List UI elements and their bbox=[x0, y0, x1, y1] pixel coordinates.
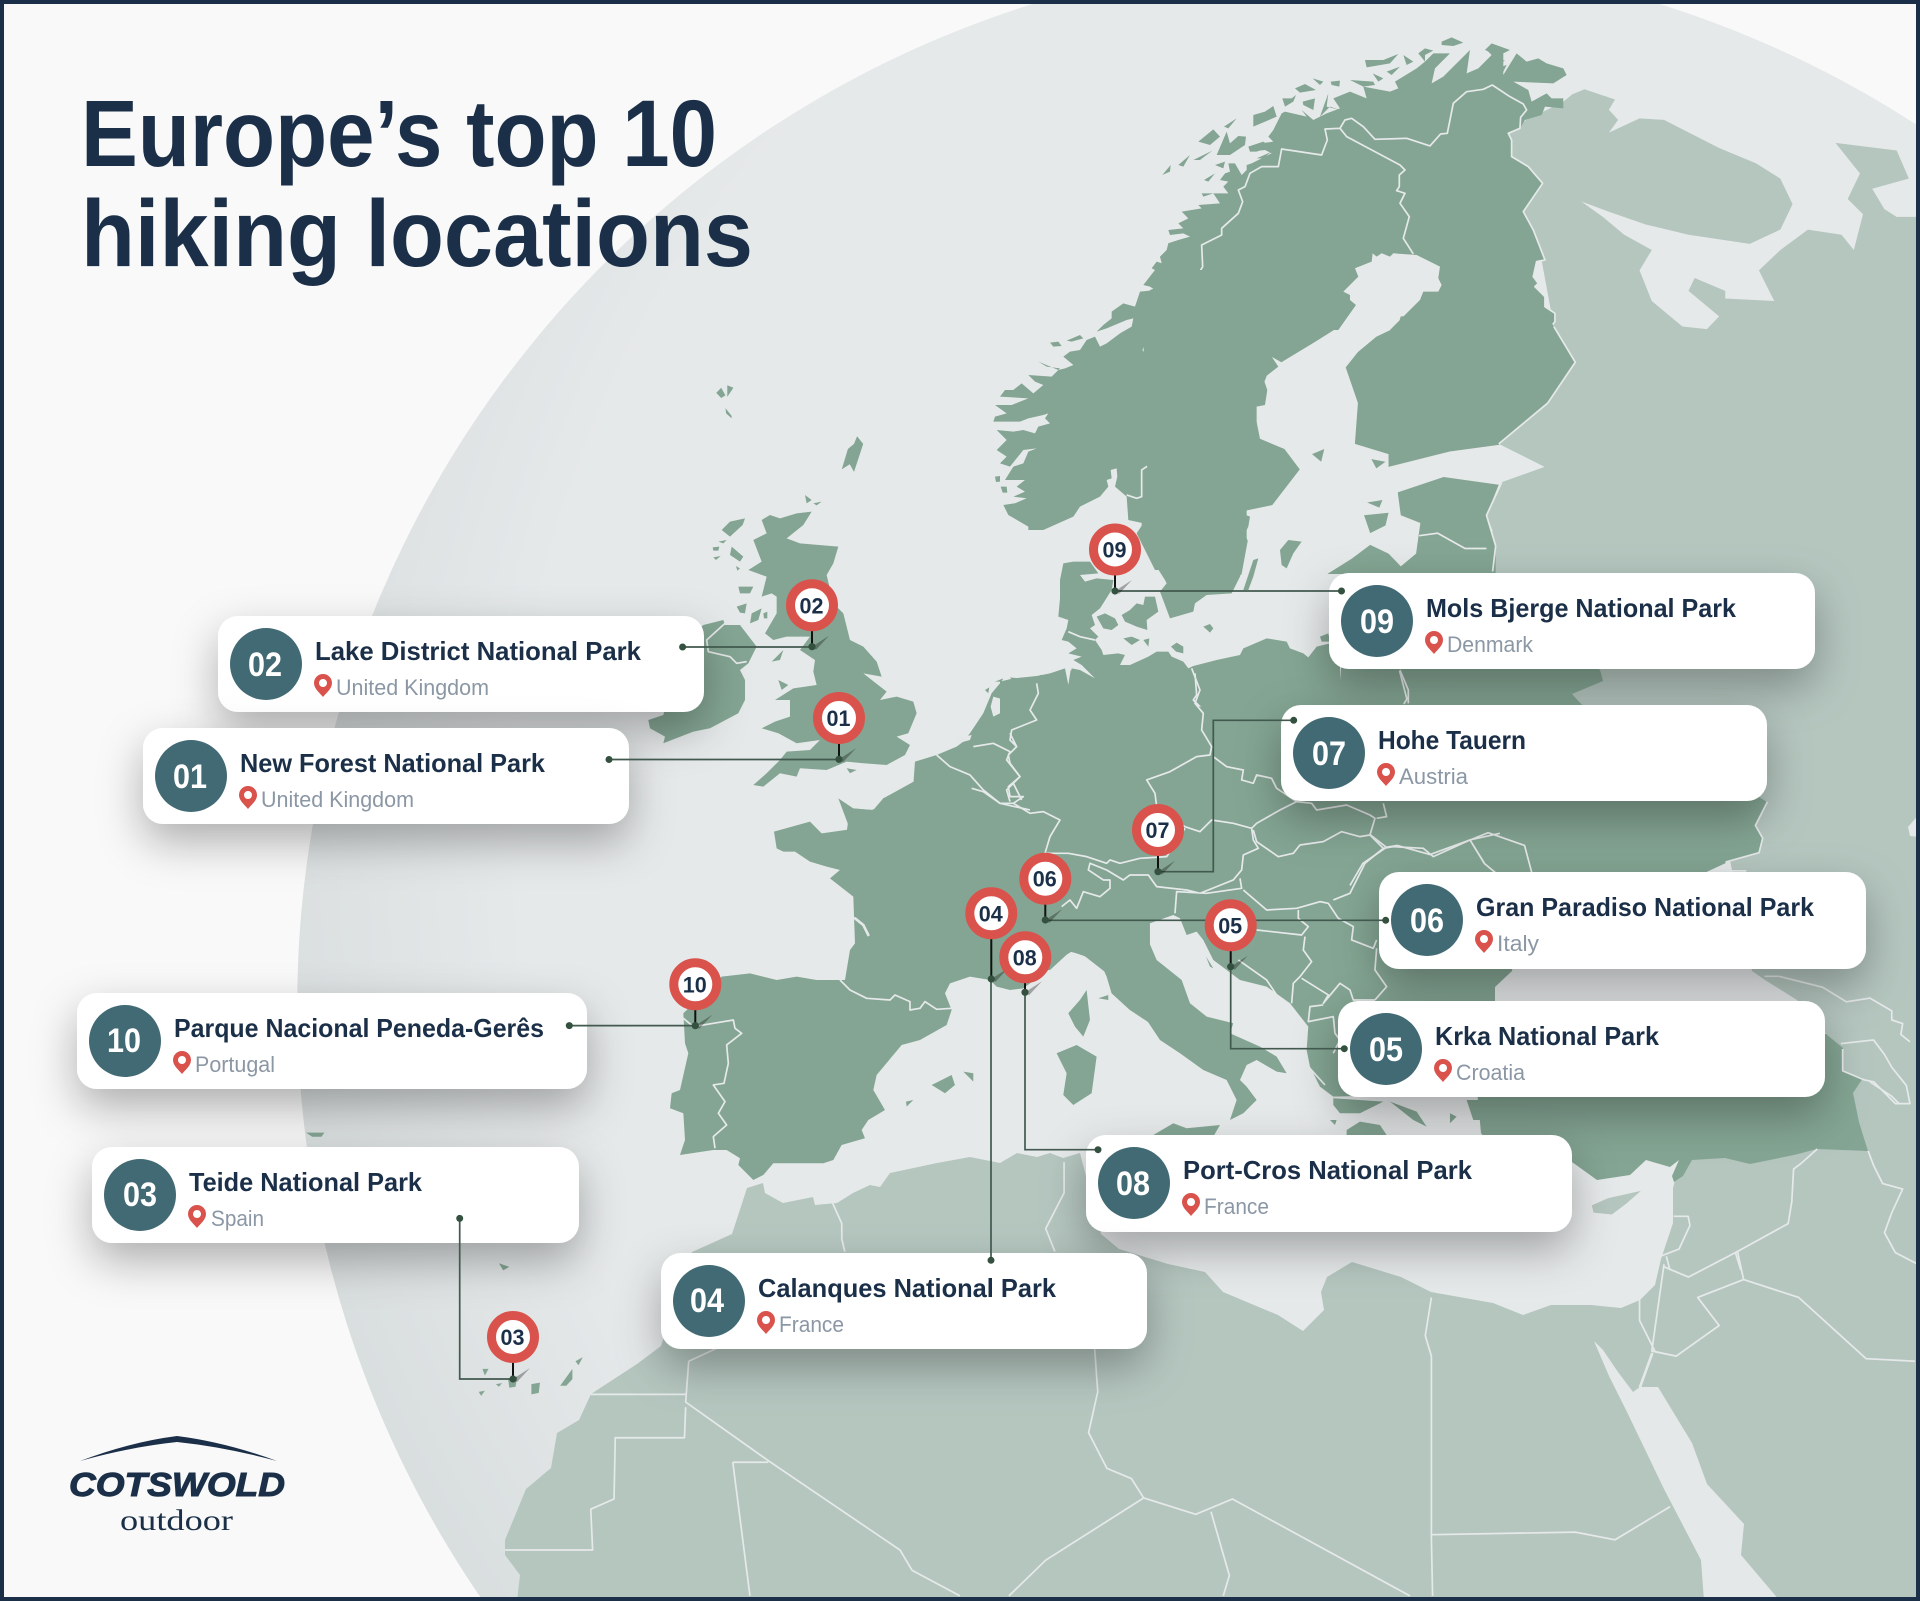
card 06: Gran Paradiso: 06 bbox=[1410, 902, 1444, 940]
pin 05: 05 bbox=[1218, 913, 1242, 938]
land: Russia and east bbox=[1488, 89, 1916, 1140]
card 07: Hohe Tauern: Austria bbox=[1399, 764, 1469, 789]
borders: Caucasus and Middle East bbox=[1350, 802, 1920, 1270]
pin 01: 01 bbox=[826, 706, 850, 731]
card 07: Hohe Tauern bbox=[1281, 705, 1767, 801]
card 04: Calanques: France bbox=[779, 1312, 844, 1337]
pin 07: 07 bbox=[1146, 818, 1170, 843]
borders: central Europe and Balkans bbox=[1000, 668, 1500, 1085]
card 02: Lake District: United Kingdom bbox=[336, 675, 489, 700]
card 06: Gran Paradiso: Gran Paradiso National Park bbox=[1476, 892, 1815, 922]
card 03: Teide: Spain bbox=[211, 1206, 264, 1231]
logo: Cotswold Outdoor: COTSWOLD bbox=[69, 1466, 285, 1503]
borders: northern Scandinavia bbox=[1200, 84, 1556, 324]
card 01: New Forest: 01 bbox=[173, 758, 207, 796]
title bbox=[81, 81, 753, 287]
logo: Cotswold Outdoor bbox=[69, 1436, 285, 1537]
land: Canary and other islands bbox=[306, 1133, 583, 1396]
card 01: New Forest: New Forest National Park bbox=[240, 748, 546, 778]
card 06: Gran Paradiso: Italy bbox=[1497, 931, 1539, 956]
card 10: Peneda-Gerês: 10 bbox=[107, 1022, 141, 1060]
card 07: Hohe Tauern: 07 bbox=[1312, 735, 1346, 773]
land: central Europe, Italy and Balkans bbox=[1000, 668, 1500, 1140]
borders: Low Countries bbox=[937, 733, 1030, 810]
card 05: Krka bbox=[1338, 1001, 1825, 1097]
card 04: Calanques bbox=[661, 1253, 1147, 1349]
card 03: Teide: Teide National Park bbox=[189, 1167, 423, 1197]
pin 10: 10 bbox=[683, 972, 707, 997]
card 04: Calanques: 04 bbox=[690, 1282, 724, 1320]
pin 06 bbox=[1024, 857, 1067, 924]
borders: North Africa bbox=[505, 1203, 960, 1596]
borders: Egypt, Libya, Arabia bbox=[1009, 1162, 1915, 1596]
pin 05 bbox=[1209, 904, 1252, 970]
land: Cyprus bbox=[1592, 1191, 1641, 1214]
land: central Sweden, southern Finland and Baltics bbox=[1144, 316, 1575, 587]
land: Africa and Middle East bbox=[505, 1140, 1920, 1601]
card 08: Port-Cros bbox=[1086, 1135, 1572, 1232]
card 02: Lake District: Lake District National Park bbox=[315, 636, 642, 666]
card 01: New Forest bbox=[143, 728, 629, 824]
pin 01 bbox=[818, 696, 860, 763]
card 06: Gran Paradiso bbox=[1379, 872, 1866, 969]
card 04: Calanques: Calanques National Park bbox=[758, 1273, 1057, 1303]
pin 03: 03 bbox=[500, 1325, 524, 1350]
card 03: Teide bbox=[92, 1147, 579, 1243]
land: Britain, Ireland and Low Countries bbox=[648, 495, 1016, 830]
land: northern Scandinavia and Finland bbox=[1150, 37, 1567, 330]
islands: northern Norway bbox=[1162, 37, 1510, 182]
connector lines bbox=[456, 588, 1389, 1379]
sea: Red Sea and Caspian bbox=[1594, 813, 1920, 1601]
pin 07 bbox=[1136, 808, 1180, 875]
title: Europe’s top 10 bbox=[81, 81, 717, 187]
land: France and Iberia bbox=[670, 780, 1150, 1180]
land: Turkey bbox=[1478, 1034, 1868, 1182]
card 09: Mols Bjerge: 09 bbox=[1360, 603, 1394, 641]
card 08: Port-Cros: France bbox=[1204, 1194, 1269, 1219]
card 05: Krka: 05 bbox=[1369, 1031, 1403, 1069]
card 10: Peneda-Gerês: Portugal bbox=[195, 1052, 275, 1077]
islands: Danish and Baltic bbox=[1097, 540, 1330, 653]
islands: south-west Norway bbox=[995, 335, 1083, 493]
card 02: Lake District: 02 bbox=[248, 646, 282, 684]
card 03: Teide: 03 bbox=[123, 1176, 157, 1214]
card 08: Port-Cros: 08 bbox=[1116, 1165, 1150, 1203]
land: North Atlantic islands bbox=[716, 385, 863, 472]
pin 09 bbox=[1094, 528, 1136, 595]
pin 09: 09 bbox=[1102, 538, 1126, 562]
card 07: Hohe Tauern: Hohe Tauern bbox=[1378, 725, 1526, 755]
land: southern Sweden, Denmark and north German coast bbox=[1040, 510, 1340, 707]
land: southern Norway and Sweden bbox=[993, 270, 1278, 570]
title: hiking locations bbox=[81, 181, 753, 287]
land: Poland, Ukraine and Balkans east bbox=[1340, 668, 1766, 1001]
card 10: Peneda-Gerês bbox=[77, 993, 587, 1089]
pin 03 bbox=[492, 1316, 534, 1383]
card 09: Mols Bjerge: Mols Bjerge National Park bbox=[1426, 593, 1737, 623]
logo: Cotswold Outdoor: outdoor bbox=[120, 1504, 233, 1537]
borders: France, Spain, Portugal bbox=[684, 788, 1000, 1148]
pin 08: 08 bbox=[1013, 945, 1037, 970]
card 10: Peneda-Gerês: Parque Nacional Peneda-Gerês bbox=[174, 1013, 544, 1043]
card 01: New Forest: United Kingdom bbox=[261, 787, 414, 812]
card 08: Port-Cros: Port-Cros National Park bbox=[1183, 1155, 1473, 1185]
pin 02 bbox=[790, 584, 834, 650]
pin 06: 06 bbox=[1033, 867, 1057, 892]
card 02: Lake District bbox=[218, 616, 704, 712]
card 09: Mols Bjerge bbox=[1329, 573, 1815, 669]
borders: Baltics and Finland east bbox=[1400, 327, 1575, 704]
card 05: Krka: Krka National Park bbox=[1435, 1021, 1660, 1051]
pin 08 bbox=[1004, 936, 1047, 996]
card 09: Mols Bjerge: Denmark bbox=[1447, 632, 1534, 657]
pin 04: 04 bbox=[979, 901, 1004, 926]
land: northern France and Low Countries bbox=[847, 684, 1000, 830]
pin 10 bbox=[674, 963, 717, 1029]
card 05: Krka: Croatia bbox=[1456, 1060, 1526, 1085]
pin 02: 02 bbox=[800, 593, 824, 618]
pin 04 bbox=[970, 892, 1013, 983]
